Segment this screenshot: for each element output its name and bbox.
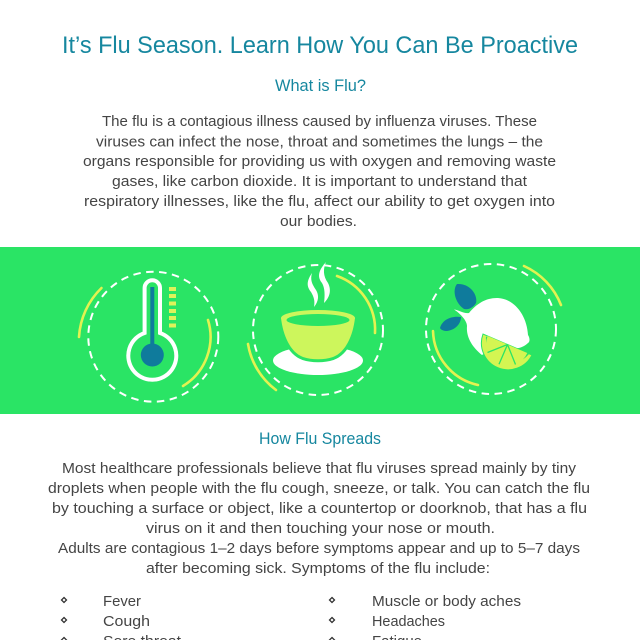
symptom list: left column: Cough	[103, 613, 150, 630]
icon: hot drink cup	[248, 262, 383, 395]
text block: flu definition: respiratory illnesses, like the flu, affect our ability to get oxygen into	[84, 193, 555, 210]
text block: how flu spreads: Most healthcare professionals believe that flu viruses spread mainly by tiny	[62, 460, 577, 477]
text block: flu definition: organs responsible for providing us with oxygen and removing waste	[83, 153, 556, 170]
symptom list: left column: Fever	[103, 593, 141, 610]
icon: thermometer	[79, 272, 218, 402]
heading: what is flu: What is Flu?	[275, 76, 366, 95]
symptom list: right column: Headaches	[372, 613, 445, 630]
title: It’s Flu Season. Learn How You Can Be Proactive	[62, 32, 578, 59]
symptom list: right column: Muscle or body aches	[372, 593, 521, 610]
text block: flu definition: gases, like carbon dioxide. It is important to understand that	[112, 173, 528, 190]
text block: flu definition	[83, 113, 556, 230]
symptom list: left column	[62, 593, 182, 640]
text block: how flu spreads: after becoming sick. Symptoms of the flu include:	[146, 560, 490, 577]
green band	[0, 247, 640, 414]
text block: flu definition: The flu is a contagious illness caused by influenza viruses. These	[102, 113, 537, 130]
heading: how flu spreads: How Flu Spreads	[259, 429, 381, 448]
text block: flu definition: our bodies.	[280, 213, 357, 230]
text block: how flu spreads: droplets when people with the flu cough, sneeze, or talk. You can catch the flu	[48, 480, 590, 497]
text block: how flu spreads: Adults are contagious 1–2 days before symptoms appear and up to 5–7 days	[58, 540, 580, 557]
icon: lemon with leaves and slice	[426, 264, 561, 394]
text block: how flu spreads	[48, 460, 590, 577]
text block: flu definition: viruses can infect the nose, throat and sometimes the lungs – the	[96, 134, 543, 150]
text block: how flu spreads: virus on it and then touching your nose or mouth.	[146, 520, 495, 537]
text block: how flu spreads: by touching a surface or object, like a countertop or doorknob, that has a flu	[52, 500, 587, 517]
symptom list: right column	[330, 593, 521, 640]
